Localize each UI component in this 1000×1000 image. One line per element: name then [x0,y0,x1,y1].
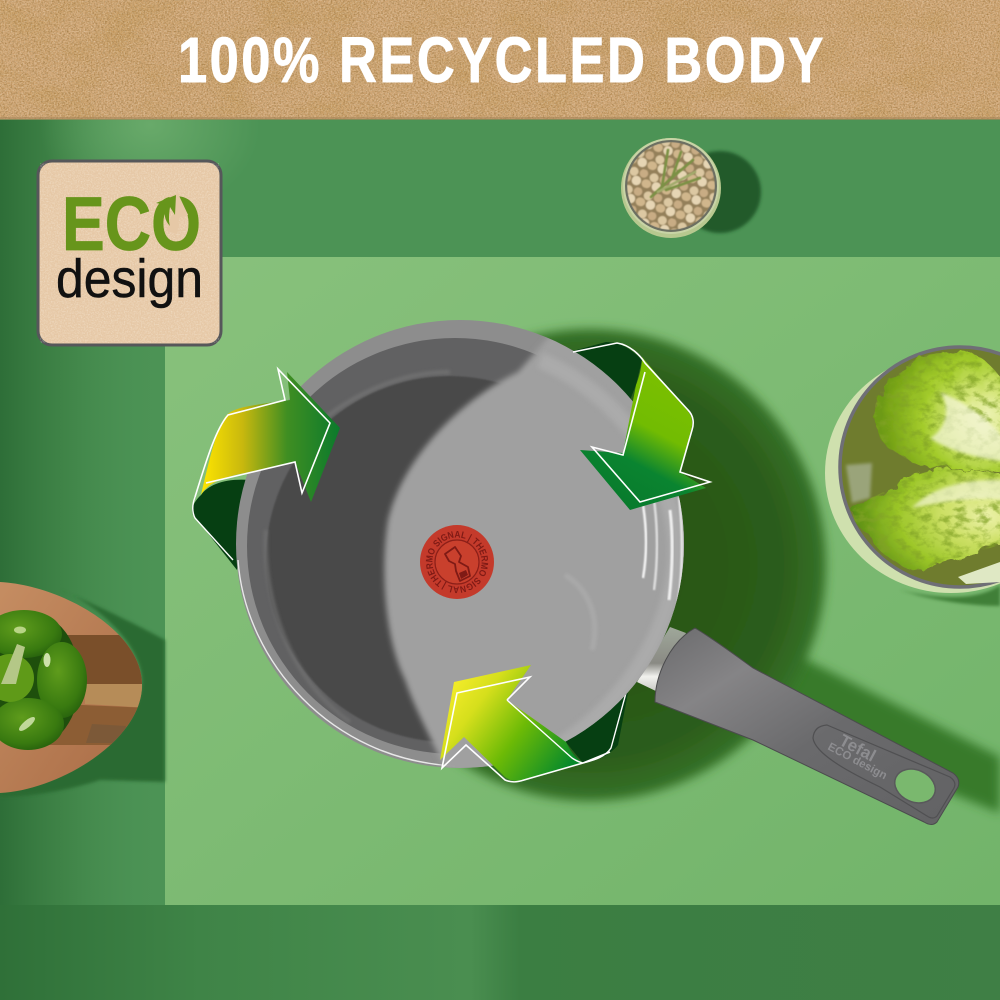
pepper stem [1,644,25,684]
pepper on wooden board [0,582,165,797]
recycling arrow: right [573,343,710,510]
sunlit area inside the pan [384,330,700,772]
pale rib [912,480,1000,508]
title: 100% RECYCLED BODY [178,25,823,96]
bowl interior and rim [840,347,1000,587]
peppercorn bowl [621,138,761,238]
bowl outer wall [825,353,1000,593]
eco design text: ECO design [826,741,889,782]
recycling arrow gap in the O [168,195,186,232]
arrow head [156,195,176,226]
pan handle [655,628,959,824]
peppercorns [627,142,715,230]
bowl shadow [679,151,761,233]
thermo signal seal [420,525,494,599]
embossed logo plate [813,725,955,818]
underside: bottom arrow [560,693,628,763]
rim highlights [643,505,646,578]
wood shade [50,635,142,745]
bowl rim [624,139,718,233]
steel handle collar [637,627,686,693]
wooden board [0,582,142,793]
eco design badge [38,161,221,345]
bowl table shadow [900,585,1000,606]
brand text: Tefal [836,731,879,766]
pan inner wall [247,338,663,754]
recycling arrow undersides behind the pan [192,342,642,763]
pale rib [930,392,1000,462]
lettuce bowl [825,347,1000,606]
underside: left arrow [192,480,250,570]
underside: right arrow [569,342,642,405]
pan rim [236,320,684,768]
pepper crown [0,654,34,702]
frying pan [236,320,684,768]
recycling arrow: left [195,369,340,502]
rosemary sprig [651,150,700,197]
eco word: ECO [62,182,201,267]
interior highlight [846,463,872,503]
hanging hole [889,763,941,809]
pepper body [0,610,87,750]
bowl body [621,138,721,238]
kraft paper header band [0,0,1000,120]
lower lettuce half [852,469,1000,570]
pan and handle cast shadow [354,329,1000,813]
design word: design [56,249,203,309]
seal ring text: THERMO SIGNAL | THERMO SIGNAL | [426,531,488,594]
light green panel [165,257,1000,905]
recycling arrow: bottom [440,665,610,782]
highlights [14,626,26,634]
hourglass icon [445,547,470,581]
board shadow [0,590,165,797]
pan floor [266,376,632,742]
upper lettuce half [874,352,1000,472]
